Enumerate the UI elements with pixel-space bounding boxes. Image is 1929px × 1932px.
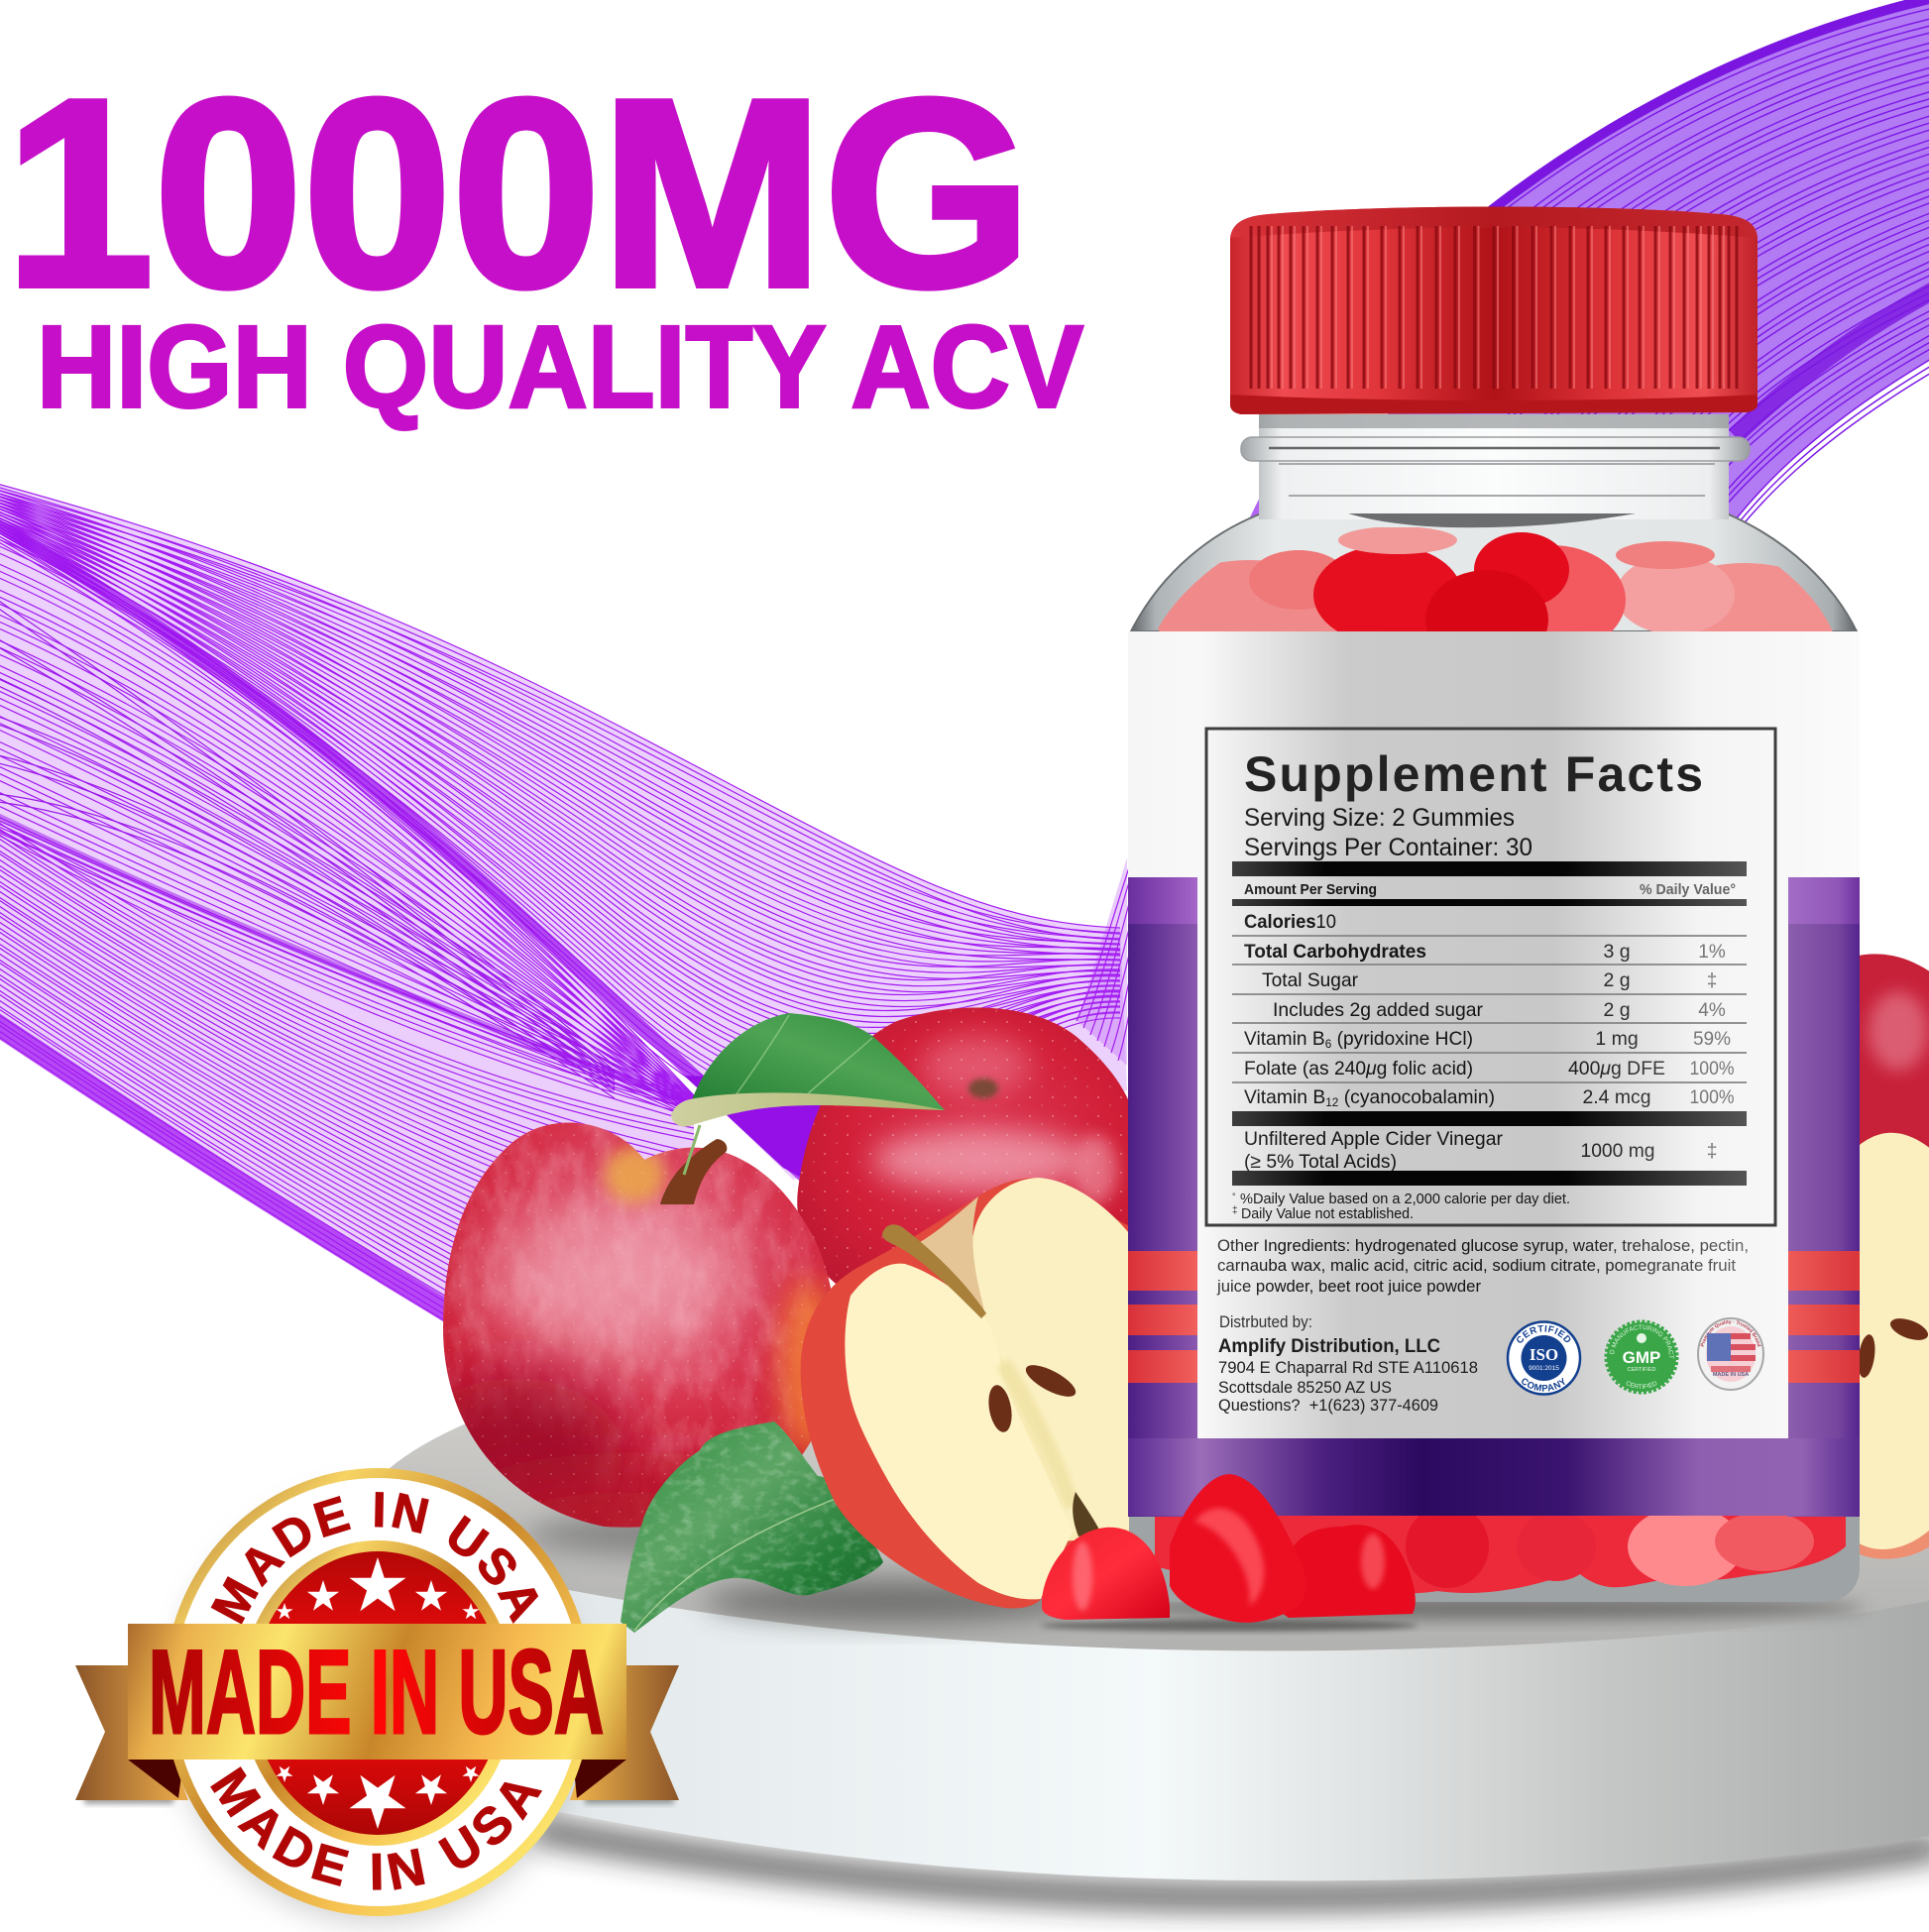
serving info: Servings Per Container: 30 [1244,834,1532,861]
red cap [1230,206,1758,414]
column headers: % Daily Value° [1640,882,1736,898]
purple line-wave ribbon, top right [1246,0,1929,609]
nutrient names: Total Sugar [1262,969,1358,991]
podium [389,1388,1929,1897]
daily value column: 100% [1689,1059,1735,1080]
nutrient names: Includes 2g added sugar [1273,999,1484,1021]
daily value column [1689,942,1735,1108]
made in USA quality seal [1697,1317,1764,1391]
label white panel [1197,872,1788,1438]
stars bottom [276,1766,480,1829]
column headers: Amount Per Serving [1244,882,1377,898]
purple line-wave ribbons, left [0,482,1127,1467]
daily value column: ‡ [1707,970,1717,991]
other ingredients text: Other Ingredients: hydrogenated glucose syrup, water, trehalose, pectin, [1217,1237,1749,1255]
panel heading: Supplement Facts [1244,746,1703,802]
apple cider vinegar row [1244,1128,1717,1173]
bottle neck [1259,414,1729,519]
nutrient names: Vitamin B [1244,1028,1326,1050]
footnotes: Daily Value not established. [1241,1205,1414,1222]
distributor text: Questions? +1(623) 377-4609 [1218,1397,1438,1415]
apple: back red [797,1007,1128,1284]
label bottom purple band [1128,1438,1860,1516]
daily value column: 100% [1689,1087,1735,1108]
column headers [1244,882,1736,898]
nutrient names: (cyanocobalamin) [1338,1086,1495,1108]
amounts column [1568,941,1665,1108]
other ingredients text [1216,1237,1749,1296]
back lobe flesh [972,1178,1130,1532]
serving info [1244,804,1532,861]
loose gummies on podium [1041,1474,1418,1632]
daily value column: 1% [1698,942,1726,963]
thick rule [1232,1111,1747,1126]
ribbon tail right [570,1665,679,1800]
footnotes: ‡ [1232,1205,1238,1216]
nutrient names: 12 [1325,1095,1339,1109]
red center [253,1551,503,1835]
made in USA badge [75,1468,679,1932]
distributor text: Distrbuted by: [1219,1313,1312,1331]
badge shadow [84,1489,674,1925]
front lobe flesh [845,1264,1073,1599]
bottle [1128,206,1860,1606]
made in USA quality seal: Premium Quality · Trusted Brand [1701,1320,1761,1346]
leaf: lower green [621,1421,883,1633]
amounts column: 400μg DFE [1568,1058,1665,1080]
nutrient names [1244,941,1495,1109]
nutrient names: Vitamin B [1244,1086,1326,1108]
podium top surface [389,1388,1929,1685]
made in USA quality seal: MADE IN USA [1713,1372,1749,1378]
ISO certified seal [1507,1320,1582,1396]
inner gold ring [241,1540,514,1846]
GMP certified seal: CERTIFIED [1626,1381,1657,1389]
daily value column: 4% [1698,1000,1726,1021]
apple: cut half [801,1178,1135,1609]
apple cider vinegar row: Unfiltered Apple Cider Vinegar [1244,1128,1504,1150]
nutrient names: (pyridoxine HCl) [1331,1028,1473,1050]
leaf: upper green [671,1013,945,1126]
nutrient names: Total Carbohydrates [1244,941,1426,963]
footnotes: %Daily Value based on a 2,000 calorie per day diet. [1240,1191,1570,1207]
ribbon folds [128,1760,626,1798]
ribbon tail left [75,1665,188,1800]
apple: front left red [443,1122,831,1528]
gummy middle [1170,1474,1305,1623]
gummy right [1279,1525,1416,1618]
label right purple side [1787,877,1860,1517]
footnotes: ° [1232,1192,1236,1201]
seeds [985,1383,1015,1434]
thick rule [1232,1171,1747,1186]
ISO certified seal: 9001:2015 [1529,1365,1559,1372]
apple cider vinegar row: ‡ [1707,1140,1717,1162]
other ingredients text: juice powder, beet root juice powder [1216,1278,1482,1296]
neck ring [1241,437,1750,461]
amounts column: 2 g [1603,999,1631,1021]
banner text: MADE IN USA [149,1626,604,1759]
amounts column: 3 g [1603,941,1631,963]
other ingredients text: carnauba wax, malic acid, citric acid, sodium citrate, pomegranate fruit [1217,1257,1736,1275]
subtitle: high quality ACV: HIGH QUALITY ACV [37,301,1083,432]
arc text top: MADE IN USA [210,1492,539,1624]
apple stem [660,1139,727,1204]
nutrient names: Folate (as 240μg folic acid) [1244,1058,1473,1080]
gummies inside shoulder [1158,527,1833,631]
white ring [173,1478,582,1906]
distributor text: 7904 E Chaparral Rd STE A110618 [1218,1359,1478,1377]
apple cider vinegar row: (≥ 5% Total Acids) [1244,1151,1397,1173]
stars top [276,1557,480,1619]
glass base with gummies [1129,1516,1860,1602]
distributor text [1218,1313,1478,1415]
stem of cut apple [882,1224,986,1318]
arc text bottom: MADE IN USA [210,1766,543,1890]
amounts column: 2.4 mcg [1582,1086,1651,1108]
thick rule [1232,861,1747,876]
purple line-wave ribbon, behind bottle left edge [1077,857,1132,1066]
title: 1000MG: 1000MG [5,45,1032,343]
core filler [976,1308,1130,1541]
GMP certified seal: GOOD MANUFACTURING PRACTICE [1610,1324,1673,1359]
label top band [1128,631,1860,879]
apple cider vinegar row: 1000 mg [1580,1140,1655,1162]
row dividers [1232,936,1747,1082]
ISO certified seal: CERTIFIED [1517,1324,1570,1343]
amounts column: 2 g [1603,969,1631,991]
GMP certified seal [1604,1320,1679,1394]
ISO certified seal: COMPANY [1522,1378,1565,1392]
serving info: Serving Size: 2 Gummies [1244,804,1515,832]
gummy left [1042,1528,1170,1620]
GMP certified seal: CERTIFIED [1628,1367,1655,1373]
outer gold ring [164,1468,592,1916]
supplement facts panel [1206,729,1775,1225]
header rule [1232,899,1747,906]
footnotes [1232,1191,1570,1222]
ISO certified seal: ISO [1530,1345,1558,1364]
apple shadows on podium [525,1513,1864,1623]
apple: right edge behind bottle [1854,954,1929,1559]
podium front side [476,1571,1929,1880]
daily value column: 59% [1693,1029,1731,1050]
distributor text: Scottsdale 85250 AZ US [1218,1379,1392,1397]
GMP certified seal: GMP [1623,1348,1660,1367]
gold banner [128,1624,626,1760]
bottle glass shoulder [1131,514,1857,631]
distributor text: Amplify Distribution, LLC [1218,1336,1440,1357]
amounts column: 1 mg [1595,1028,1639,1050]
nutrient names: 6 [1325,1037,1332,1051]
label left purple side [1128,877,1197,1517]
calories row: Calories10 [1244,912,1336,933]
